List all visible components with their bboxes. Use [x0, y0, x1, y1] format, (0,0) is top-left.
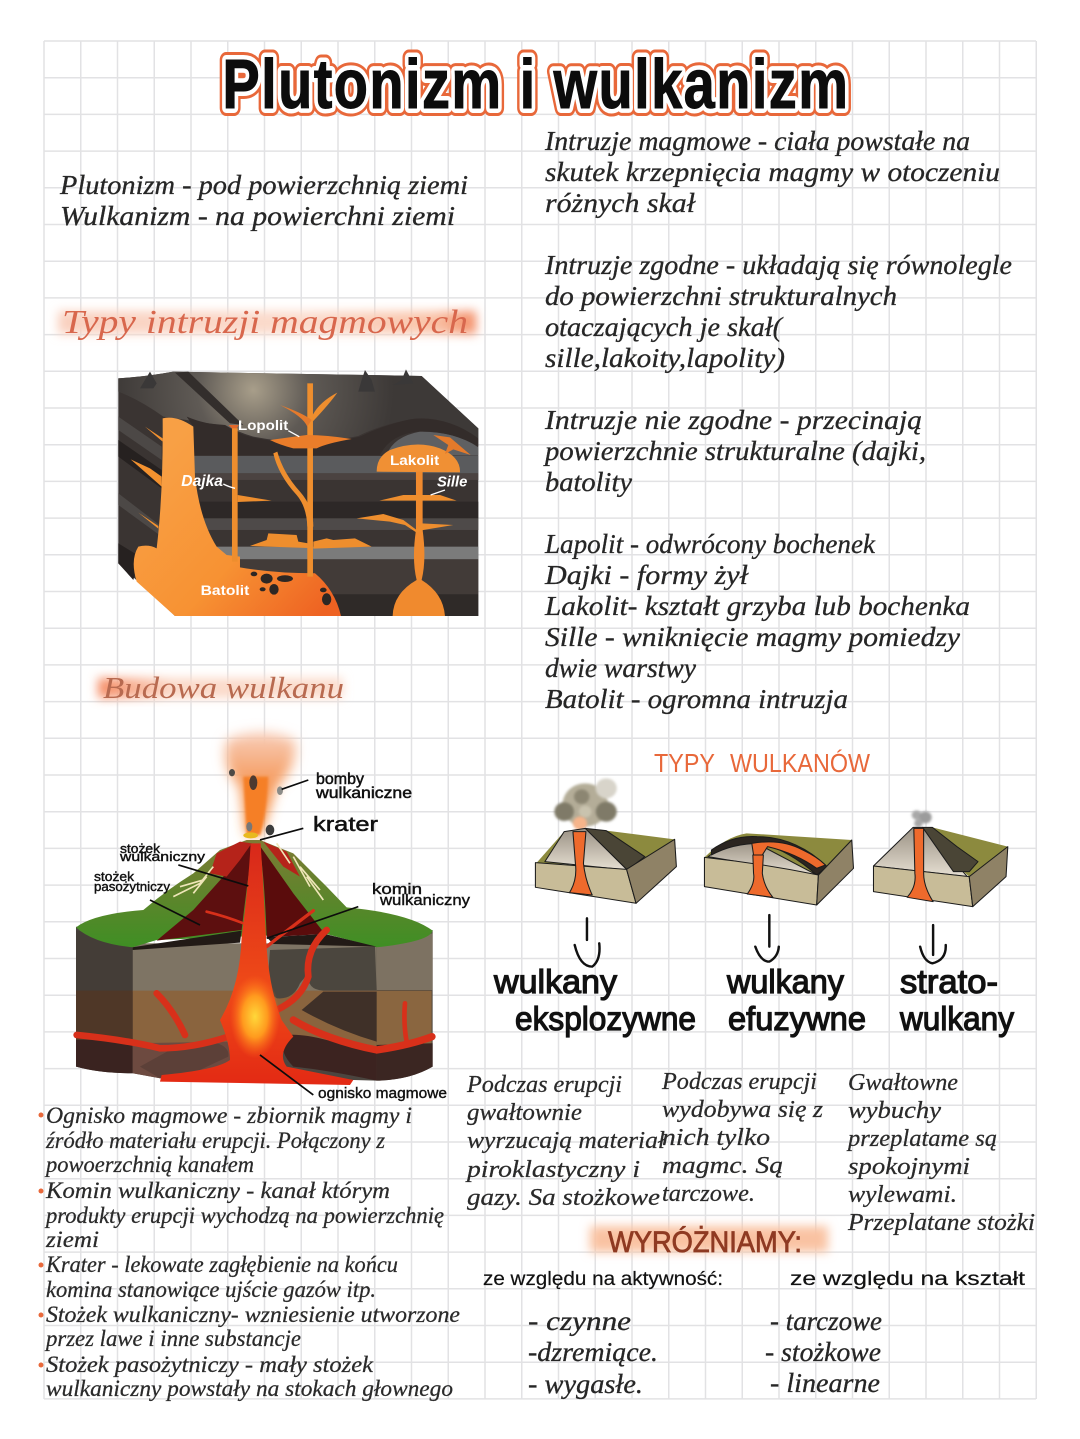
- left column: volcano glossary: Stożek pasożytniczy - mały stożek: [46, 1352, 374, 1377]
- volcano part labels: stożek: [120, 841, 161, 856]
- right column: intruzje text: skutek krzepnięcia magmy w otoczeniu: [545, 157, 1000, 187]
- red lava at the peak: [210, 842, 300, 877]
- eruption plume: [225, 732, 295, 835]
- surface: [118, 372, 478, 442]
- pointer lines: [223, 431, 445, 495]
- volcano part labels: krater: [313, 814, 378, 836]
- text: effusive volcanoes: Podczas erupcji: [661, 1069, 817, 1095]
- block body: [76, 927, 433, 1081]
- dikes: [229, 383, 471, 616]
- text: stratovolcanoes: wybuchy: [848, 1098, 941, 1124]
- right column: intruzje text: powierzchnie strukturalne (dajki,: [543, 436, 926, 466]
- stratovolcano block: [873, 827, 1008, 907]
- volcano part labels: wulkaniczny: [379, 892, 471, 909]
- bombs: [229, 769, 283, 838]
- definitions: plutonizm and wulkanizm: Plutonizm - pod powierzchnią ziemi: [59, 170, 468, 200]
- right column: intruzje text: [543, 126, 1012, 714]
- text: stratovolcanoes: [846, 1070, 1035, 1236]
- heading: wyrozniamy: WYRÓŻNIAMY:: [608, 1226, 802, 1259]
- volcano part labels: [94, 771, 471, 1102]
- text: effusive volcanoes: magmc. Są: [662, 1153, 783, 1179]
- rocks on surface: [140, 369, 413, 392]
- list: by activity: -dzremiące.: [528, 1337, 658, 1367]
- text: explosive volcanoes: gazy. Sa stożkowe: [467, 1185, 660, 1211]
- left column: volcano glossary: Ognisko magmowe - zbiornik magmy i: [46, 1103, 412, 1128]
- heading: typy wulkanow: TYPY WULKANÓW: [654, 748, 870, 778]
- volcano part labels: wulkaniczne: [315, 785, 412, 802]
- left column: volcano glossary: Krater - lekowate zagłębienie na końcu: [45, 1252, 398, 1277]
- volcano type names: wulkany: [493, 963, 618, 1000]
- title: Plutonizm i wulkanizm: [222, 46, 848, 123]
- right column: intruzje text: różnych skał: [545, 188, 697, 218]
- bullets: [38, 1112, 44, 1368]
- definitions: plutonizm and wulkanizm: [59, 170, 468, 231]
- right column: intruzje text: Intruzje magmowe - ciała powstałe na: [544, 126, 970, 156]
- volcano part labels: pasożytniczy: [94, 879, 171, 894]
- text: stratovolcanoes: Przeplatane stożki: [847, 1210, 1035, 1236]
- batholith: [134, 418, 341, 616]
- left column: volcano glossary: wulkaniczny powstały na stokach głownego: [46, 1376, 453, 1401]
- right column: intruzje text: Lakolit- kształt grzyba lub bochenka: [544, 591, 970, 621]
- diagram: volcano cross-section: [76, 732, 433, 1095]
- list: by activity: ze względu na aktywność:: [483, 1269, 723, 1290]
- rock labels: [181, 417, 467, 598]
- volcano type names: eksplozywne: [515, 1000, 696, 1037]
- text: explosive volcanoes: piroklastyczny i: [465, 1157, 640, 1183]
- volcano type names: strato-: [900, 963, 998, 1000]
- title: Plutonizm i wulkanizm: [222, 46, 848, 123]
- volcano part labels: wulkaniczny: [119, 849, 206, 864]
- text: explosive volcanoes: Podczas erupcji: [466, 1072, 622, 1098]
- smoke: [554, 778, 617, 830]
- text: effusive volcanoes: wydobywa się z: [662, 1097, 824, 1123]
- rock labels: Dajka: [181, 473, 223, 490]
- right column: intruzje text: sille,lakoity,lapolity): [545, 343, 785, 373]
- rock labels: Batolit: [201, 582, 250, 598]
- left column: volcano glossary: produkty erupcji wychodzą na powierzchnię: [44, 1203, 444, 1228]
- list: by shape: - stożkowe: [765, 1337, 881, 1367]
- text: stratovolcanoes: wylewami.: [848, 1182, 957, 1208]
- text: stratovolcanoes: Gwałtowne: [848, 1070, 958, 1096]
- heading: typy intruzji magmowych: Typy intruzji magmowych: [62, 304, 468, 341]
- volcano types diagrams: [535, 778, 1008, 967]
- text: effusive volcanoes: [661, 1069, 824, 1207]
- volcano type names: wulkany: [726, 963, 844, 1000]
- left column: volcano glossary: powoerzchnią kanałem: [44, 1152, 254, 1177]
- right column: intruzje text: dwie warstwy: [545, 653, 696, 683]
- right column: intruzje text: Dajki - formy żył: [544, 560, 750, 590]
- text: effusive volcanoes: tarczowe.: [662, 1181, 755, 1207]
- pointer lines: [150, 780, 358, 1095]
- volcano part labels: komin: [372, 881, 422, 898]
- volcano type names: efuzywne: [728, 1000, 866, 1037]
- green ground and slopes: [76, 840, 433, 947]
- list: by activity: - czynne: [528, 1306, 631, 1336]
- rock layers: [118, 417, 478, 616]
- text: stratovolcanoes: spokojnymi: [848, 1154, 970, 1180]
- right column: intruzje text: Sille - wniknięcie magmy pomiedzy: [545, 622, 960, 652]
- rock labels: Lakolit: [390, 452, 440, 468]
- volcano part labels: bomby: [316, 771, 364, 788]
- left column: volcano glossary: [38, 1103, 460, 1401]
- volcano type names: [493, 963, 1014, 1037]
- stratovolcano smoke: [912, 810, 932, 827]
- left column: volcano glossary: Komin wulkaniczny - kanał którym: [45, 1178, 390, 1203]
- list: by shape: - linearne: [770, 1368, 880, 1398]
- arrows: [575, 915, 946, 967]
- right column: intruzje text: Intruzje zgodne - układają się równolegle: [544, 250, 1012, 280]
- volcano type names: wulkany: [899, 1000, 1014, 1037]
- left column: volcano glossary: źródło materiału erupcji. Połączony z: [45, 1128, 385, 1153]
- right column: intruzje text: do powierzchni strukturalnych: [545, 281, 897, 311]
- text: explosive volcanoes: [465, 1072, 666, 1211]
- definitions: plutonizm and wulkanizm: Wulkanizm - na powierchni ziemi: [60, 201, 455, 231]
- diagram: intrusions block: [118, 369, 478, 616]
- volcano part labels: ognisko magmowe: [318, 1085, 447, 1102]
- rock labels: Lopolit: [238, 417, 289, 433]
- right column: intruzje text: Intruzje nie zgodne - przecinają: [544, 405, 922, 435]
- left column: volcano glossary: przez lawe i inne substancje: [44, 1326, 301, 1351]
- left column: volcano glossary: ziemi: [45, 1227, 99, 1252]
- rock layers: [76, 930, 433, 1081]
- right column: intruzje text: batolity: [545, 467, 632, 497]
- list: by shape: - tarczowe: [770, 1306, 882, 1336]
- main conduit and magma chamber: [160, 843, 353, 1085]
- lava branches: [77, 911, 432, 1050]
- list: by activity: [483, 1269, 723, 1399]
- left column: volcano glossary: komina stanowiące ujście gazów itp.: [46, 1277, 376, 1302]
- rock labels: Sille: [437, 475, 467, 491]
- right column: intruzje text: Lapolit - odwrócony bochenek: [544, 529, 876, 559]
- list: by shape: ze względu na kształt: [790, 1269, 1026, 1290]
- text: effusive volcanoes: nich tylko: [662, 1125, 770, 1151]
- heading: budowa wulkanu: Budowa wulkanu: [103, 670, 344, 705]
- list: by activity: - wygasłe.: [528, 1369, 643, 1399]
- text: stratovolcanoes: przeplatame są: [846, 1126, 997, 1152]
- volcano part labels: stożek: [94, 869, 135, 884]
- title: Plutonizm i wulkanizm: [222, 46, 848, 123]
- right column: intruzje text: Batolit - ogromna intruzja: [545, 684, 848, 714]
- explosive volcano block: [535, 828, 676, 903]
- pale lava streams: [173, 843, 323, 900]
- right column: intruzje text: otaczających je skał(: [545, 312, 784, 342]
- cutaway cone interior: [157, 844, 253, 941]
- list: by shape: [765, 1269, 1026, 1398]
- text: explosive volcanoes: gwałtownie: [467, 1100, 582, 1126]
- effusive volcano block: [704, 833, 853, 905]
- text: explosive volcanoes: wyrzucają materiał: [467, 1128, 666, 1154]
- left column: volcano glossary: Stożek wulkaniczny- wzniesienie utworzone: [46, 1302, 460, 1327]
- xenolith rocks: [251, 572, 331, 605]
